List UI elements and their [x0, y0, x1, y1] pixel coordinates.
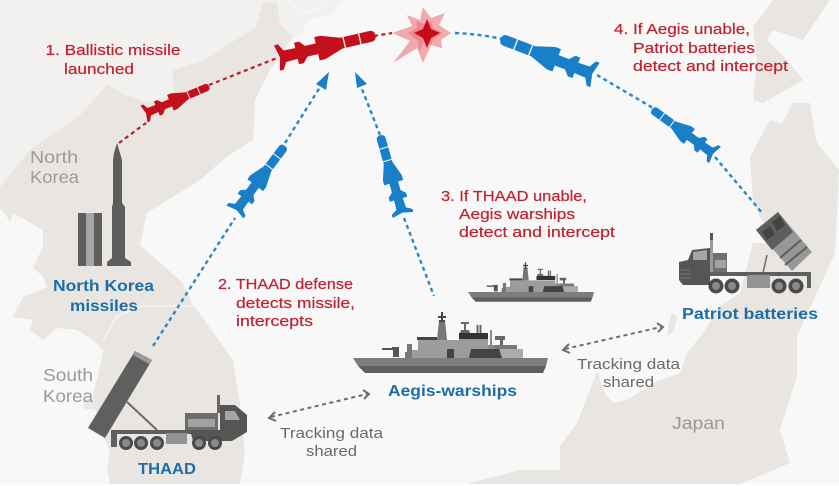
arrowhead: Aegis interceptor — [355, 72, 367, 88]
text: step 4: Patriot batteries — [633, 40, 755, 57]
missile: Aegis interceptor — [370, 132, 413, 218]
ballistic missile on pad — [107, 143, 131, 266]
text: step 2: intercepts — [236, 313, 313, 330]
label: South Korea country: Korea — [43, 386, 93, 406]
label: tracking data shared right: shared — [603, 374, 654, 391]
label: tracking data shared right: Tracking data — [577, 356, 681, 373]
label: North Korea missiles — [53, 278, 154, 315]
label: tracking data shared right — [577, 356, 681, 391]
truck chassis — [710, 272, 811, 288]
truck chassis — [111, 430, 193, 447]
text: step 3 — [441, 188, 616, 241]
launch racks — [78, 213, 102, 266]
land: Japan — [470, 103, 839, 484]
label: tracking data shared left: Tracking data — [280, 425, 384, 442]
text: step 4: detect and intercept — [633, 58, 789, 75]
label: North Korea country: Korea — [30, 167, 79, 187]
truck cab — [679, 248, 710, 285]
text: step 2: detects missile, — [236, 295, 355, 312]
missile: small red ballistic — [140, 78, 213, 122]
trajectory: red ballistic path — [119, 33, 392, 143]
text: step 3: Aegis warships — [459, 206, 575, 223]
arrowhead: THAAD interceptor — [316, 72, 329, 90]
arrow: tracking data THAAD to Aegis — [269, 390, 369, 421]
trajectory: blue intercept paths — [153, 33, 763, 346]
missile: large red ballistic — [274, 23, 378, 71]
label: North Korea missiles: North Korea — [53, 278, 154, 295]
text: step 4: 4. If Aegis unable, — [614, 21, 750, 38]
icon: THAAD launcher truck — [88, 351, 247, 450]
wheels — [708, 278, 804, 294]
land: North and South Korea — [0, 2, 293, 484]
missile: small Patriot interceptor — [646, 101, 721, 163]
wheels — [119, 436, 222, 450]
text: step 1: 1. Ballistic missile — [46, 42, 180, 59]
text: step 4 — [614, 21, 789, 75]
land: China and Russia — [0, 0, 342, 187]
label: Japan country: Japan — [672, 413, 725, 433]
text: step 2: 2. THAAD defense — [218, 276, 353, 293]
label: South Korea country — [43, 365, 93, 406]
text: step 1 — [46, 42, 180, 78]
launcher box — [756, 212, 812, 271]
launcher tube — [88, 351, 152, 438]
icon: small Aegis warship — [468, 262, 594, 302]
label: North Korea missiles: missiles — [70, 298, 138, 315]
label: tracking data shared left: shared — [306, 443, 357, 460]
missile: large Patriot interceptor — [496, 27, 600, 87]
text: step 1: launched — [64, 61, 134, 78]
label: North Korea country — [30, 147, 79, 187]
label: North Korea country: North — [30, 147, 78, 167]
icon: Patriot battery truck — [679, 212, 812, 294]
arrow: tracking data Aegis to Patriot — [563, 323, 663, 353]
label: South Korea country: South — [43, 365, 93, 385]
text: step 3: detect and intercept — [459, 224, 616, 241]
text: step 2 — [218, 276, 355, 330]
icon: explosion — [392, 7, 451, 63]
text: step 3: 3. If THAAD unable, — [441, 188, 587, 205]
icon: North Korea missile launcher — [78, 143, 131, 266]
label: Patriot batteries: Patriot batteries — [682, 306, 818, 323]
label: THAAD: THAAD — [138, 461, 196, 478]
missile: THAAD interceptor — [226, 139, 293, 218]
truck cab — [190, 405, 247, 441]
label: Aegis-warships: Aegis-warships — [388, 383, 517, 400]
icon: large Aegis warship — [353, 312, 548, 373]
label: tracking data shared left — [280, 425, 384, 460]
